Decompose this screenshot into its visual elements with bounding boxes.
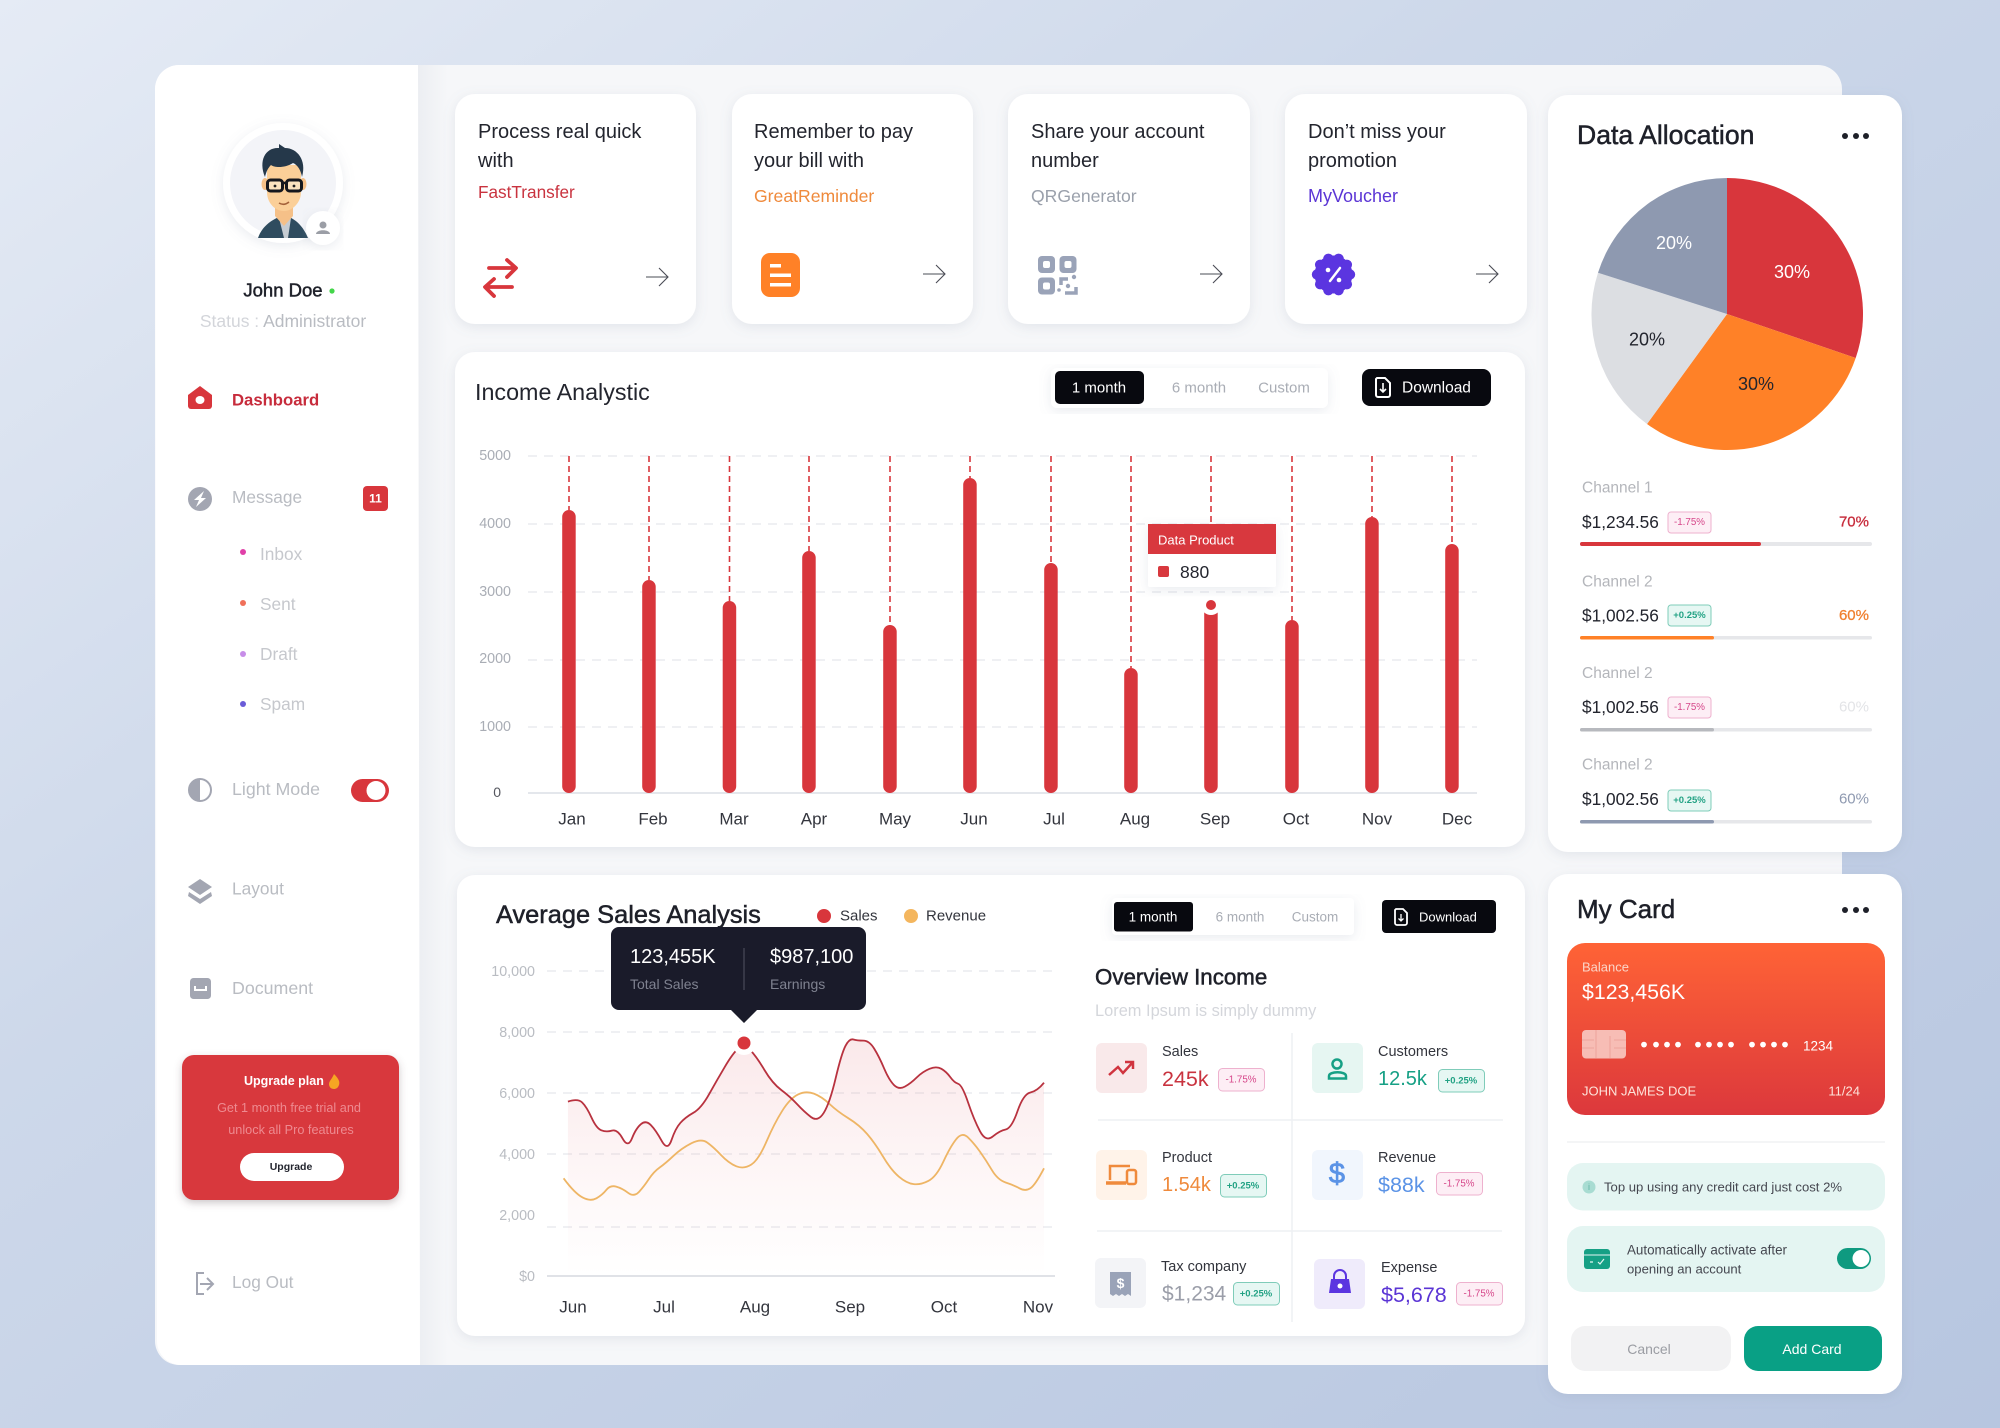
- icon: transfer arrows: [485, 260, 516, 296]
- pie chart: 20%: [1656, 233, 1692, 253]
- metric: product: [1096, 1150, 1266, 1200]
- metric: expense: Expense: [1381, 1260, 1437, 1276]
- nav: log out: [197, 1272, 294, 1294]
- channel 3: 60%: [1839, 698, 1869, 716]
- channel 4: Channel 2: [1582, 756, 1653, 774]
- metric: revenue: $: [1329, 1158, 1345, 1190]
- nav: log out: Log Out: [232, 1272, 294, 1292]
- line chart: $0: [519, 1269, 535, 1285]
- nav: dashboard: [188, 386, 319, 410]
- metric: expense: -1.75%: [1463, 1288, 1495, 1300]
- panel: upgrade plan: Get 1 month free trial and: [217, 1101, 361, 1115]
- period tabs: Custom: [1258, 380, 1310, 396]
- line chart: 8,000: [499, 1025, 535, 1041]
- metric: tax company: [1095, 1258, 1280, 1308]
- card: qr generator: QRGenerator: [1031, 186, 1137, 206]
- card: great reminder: GreatReminder: [754, 186, 874, 206]
- main window panel: [155, 65, 1842, 1365]
- card: fast transfer: with: [477, 150, 514, 172]
- bar chart: 4000: [479, 516, 511, 532]
- line chart: 6,000: [499, 1086, 535, 1102]
- download button: [1382, 900, 1496, 933]
- metric: sales: Sales: [1162, 1044, 1198, 1060]
- metric: revenue: Revenue: [1378, 1150, 1436, 1166]
- heading: Data Allocation: [1577, 120, 1754, 150]
- channel 1: -1.75%: [1674, 517, 1705, 528]
- download button: [1362, 369, 1491, 406]
- card: great reminder: your bill with: [754, 150, 864, 172]
- nav: draft: Draft: [260, 644, 298, 664]
- channel 4: [1580, 756, 1872, 824]
- arrow: [923, 265, 945, 283]
- card: great reminder: [732, 94, 973, 324]
- card: fast transfer: Process real quick: [478, 121, 642, 143]
- channel 1: [1580, 480, 1872, 546]
- pie chart: 30%: [1738, 374, 1774, 394]
- channel 2: Channel 2: [1582, 574, 1653, 590]
- download button: Download: [1419, 910, 1477, 924]
- nav: light mode: Light Mode: [232, 779, 320, 799]
- metric: expense: [1314, 1259, 1502, 1309]
- heading: My Card: [1577, 894, 1675, 924]
- card: my voucher: [1285, 94, 1527, 324]
- nav: message: 11: [369, 492, 382, 506]
- channel 3: [1580, 665, 1872, 732]
- cancel button: Cancel: [1627, 1341, 1671, 1357]
- channel 3: -1.75%: [1674, 702, 1705, 713]
- nav: spam: [240, 694, 305, 714]
- bar chart: Feb: [638, 810, 668, 828]
- tooltip: total sales and earnings: Total Sales: [630, 976, 698, 992]
- bar chart: 3000: [479, 584, 511, 600]
- line chart: Jun: [559, 1298, 587, 1316]
- tooltip: data product: Data Product: [1158, 532, 1234, 548]
- bar chart: Oct: [1283, 810, 1309, 828]
- nav: light mode: [189, 779, 389, 802]
- line chart: 4,000: [499, 1147, 535, 1163]
- subtitle: Lorem Ipsum is simply dummy: [1095, 1002, 1317, 1020]
- tooltip: data product: 880: [1180, 562, 1209, 582]
- line chart: Sep: [835, 1298, 865, 1316]
- user name: John Doe: [243, 280, 323, 300]
- bar chart: Dec: [1442, 810, 1473, 828]
- arrow: [1476, 265, 1498, 283]
- bar chart: 5000: [479, 448, 511, 464]
- metric: sales: [1096, 1043, 1264, 1093]
- line chart: Aug: [740, 1298, 770, 1316]
- tooltip: total sales and earnings: [611, 927, 866, 1023]
- tooltip: total sales and earnings: Earnings: [770, 976, 825, 992]
- top up notice: i: [1588, 1182, 1590, 1192]
- top up notice: Top up using any credit card just cost 2%: [1604, 1180, 1842, 1194]
- card: qr generator: Share your account: [1031, 121, 1205, 143]
- nav: layout: [188, 878, 284, 904]
- card: qr generator: [1008, 94, 1250, 324]
- more menu: [1842, 133, 1869, 139]
- card: my voucher: promotion: [1308, 150, 1397, 172]
- period tabs: 6 month: [1216, 910, 1264, 924]
- arrow: [646, 268, 668, 286]
- nav: inbox: Inbox: [260, 544, 303, 564]
- metric: customers: 12.5k: [1378, 1068, 1428, 1090]
- period tabs: [1051, 368, 1328, 408]
- line chart: Jul: [653, 1298, 675, 1316]
- channel 2: [1580, 574, 1872, 640]
- panel: data allocation: [1548, 95, 1902, 852]
- metric: customers: +0.25%: [1445, 1076, 1478, 1086]
- credit card: $123,456K: [1582, 980, 1685, 1004]
- tooltip: total sales and earnings: $987,100: [770, 946, 853, 968]
- bar chart: [479, 448, 1477, 828]
- channel 3: Channel 2: [1582, 665, 1653, 682]
- nav: inbox: [240, 544, 303, 564]
- metric: product: 1.54k: [1162, 1174, 1212, 1196]
- icon: voucher badge: [1312, 254, 1355, 295]
- bar chart: Jun: [960, 810, 988, 828]
- add card button: [1744, 1326, 1882, 1371]
- icon: reminder list: [761, 253, 800, 297]
- auto activate option: opening an account: [1627, 1262, 1742, 1276]
- period tabs: 1 month: [1072, 380, 1126, 396]
- metric: revenue: [1312, 1150, 1482, 1200]
- nav: sent: Sent: [260, 594, 296, 614]
- panel: upgrade plan: unlock all Pro features: [228, 1123, 354, 1137]
- nav: document: [190, 978, 313, 999]
- line chart: Oct: [931, 1298, 957, 1316]
- metric: product: Product: [1162, 1150, 1212, 1166]
- heading: Average Sales Analysis: [496, 901, 761, 929]
- card: great reminder: Remember to pay: [754, 121, 913, 143]
- auto activate option: [1567, 1226, 1885, 1292]
- channel 2: 60%: [1839, 607, 1869, 624]
- metric: revenue: $88k: [1378, 1173, 1425, 1197]
- channel 4: 60%: [1839, 790, 1869, 808]
- pie chart: [1591, 178, 1863, 450]
- line chart: 2,000: [499, 1208, 535, 1224]
- panel: income analytic: [455, 352, 1525, 847]
- channel 4: +0.25%: [1673, 795, 1706, 806]
- auto activate option: Automatically activate after: [1627, 1242, 1788, 1258]
- card: my voucher: Don’t miss your: [1308, 121, 1446, 143]
- heading: Income Analystic: [475, 379, 650, 405]
- bar chart: Mar: [719, 810, 749, 828]
- panel: upgrade plan: [182, 1055, 399, 1200]
- channel 2: +0.25%: [1673, 610, 1706, 621]
- pie chart: 30%: [1774, 262, 1810, 282]
- bar chart: Nov: [1362, 810, 1393, 828]
- user status: Status : Administrator: [200, 311, 366, 331]
- legend: Revenue: [926, 908, 986, 924]
- metric: sales: 245k: [1162, 1067, 1209, 1091]
- legend: Sales: [840, 908, 878, 924]
- bar chart: Apr: [801, 810, 828, 828]
- channel 3: $1,002.56: [1582, 697, 1659, 717]
- channel 1: Channel 1: [1582, 480, 1653, 496]
- panel: upgrade plan: Upgrade: [270, 1161, 312, 1173]
- metric: expense: $5,678: [1381, 1283, 1447, 1307]
- card: fast transfer: [455, 94, 696, 324]
- tooltip: total sales and earnings: 123,455K: [630, 946, 716, 968]
- bar chart: May: [879, 810, 912, 828]
- nav: spam: Spam: [260, 694, 305, 714]
- line chart: [491, 964, 1055, 1316]
- period tabs: Custom: [1292, 910, 1338, 924]
- bar chart: 0: [493, 784, 501, 800]
- cancel button: [1571, 1326, 1731, 1371]
- credit card: 11/24: [1828, 1084, 1860, 1098]
- more menu: [1842, 907, 1869, 913]
- add card button: Add Card: [1782, 1341, 1842, 1357]
- period tabs: 6 month: [1172, 380, 1226, 396]
- metric: tax company: $: [1117, 1275, 1125, 1291]
- tooltip: data product: [1148, 524, 1276, 587]
- nav: dashboard: Dashboard: [232, 390, 319, 410]
- arrow: [1200, 265, 1222, 283]
- panel: average sales analysis: [457, 875, 1525, 1336]
- bar chart: 2000: [479, 651, 511, 667]
- metric: sales: -1.75%: [1225, 1074, 1257, 1086]
- heading: overview income: Overview Income: [1095, 964, 1267, 990]
- panel: upgrade plan: Upgrade plan: [244, 1074, 324, 1088]
- bar chart: Sep: [1200, 810, 1230, 828]
- credit card: JOHN JAMES DOE: [1582, 1084, 1696, 1098]
- metric: revenue: -1.75%: [1443, 1178, 1475, 1190]
- pie chart: 20%: [1629, 330, 1665, 350]
- line chart: Nov: [1023, 1298, 1054, 1316]
- panel: sidebar: [155, 65, 420, 1365]
- avatar: [223, 123, 343, 245]
- credit card: Balance: [1582, 960, 1629, 974]
- bar chart: Jul: [1043, 810, 1065, 828]
- channel 2: $1,002.56: [1582, 606, 1659, 626]
- nav: draft: [240, 644, 298, 664]
- icon: qr code: [1038, 256, 1076, 294]
- card: qr generator: number: [1031, 150, 1099, 172]
- metric: customers: [1312, 1043, 1484, 1093]
- period tabs: 1 month: [1129, 910, 1177, 924]
- nav: sent: [240, 594, 296, 614]
- period tabs: [1112, 898, 1354, 935]
- metric: tax company: Tax company: [1161, 1259, 1247, 1275]
- channel 1: $1,234.56: [1582, 512, 1659, 532]
- credit card: 1234: [1803, 1038, 1834, 1054]
- nav: message: Message: [232, 487, 302, 507]
- bar chart: Jan: [558, 810, 586, 828]
- download button: Download: [1402, 380, 1471, 396]
- nav: layout: Layout: [232, 878, 284, 898]
- nav: message: [188, 486, 388, 511]
- credit card: [1567, 943, 1885, 1115]
- panel: my card: [1548, 874, 1902, 1394]
- bar chart: 1000: [479, 719, 511, 735]
- metric: product: +0.25%: [1227, 1180, 1260, 1192]
- metric: tax company: $1,234: [1162, 1282, 1227, 1306]
- legend: [817, 908, 986, 924]
- line chart: 10,000: [491, 964, 535, 980]
- channel 4: $1,002.56: [1582, 789, 1659, 809]
- card: my voucher: MyVoucher: [1308, 186, 1398, 206]
- metric: customers: Customers: [1378, 1044, 1448, 1060]
- card: fast transfer: FastTransfer: [478, 182, 575, 202]
- metric: tax company: +0.25%: [1240, 1288, 1273, 1300]
- nav: document: Document: [232, 978, 313, 998]
- channel 1: 70%: [1839, 514, 1869, 530]
- bar chart: Aug: [1120, 810, 1150, 828]
- top up notice: [1567, 1163, 1885, 1210]
